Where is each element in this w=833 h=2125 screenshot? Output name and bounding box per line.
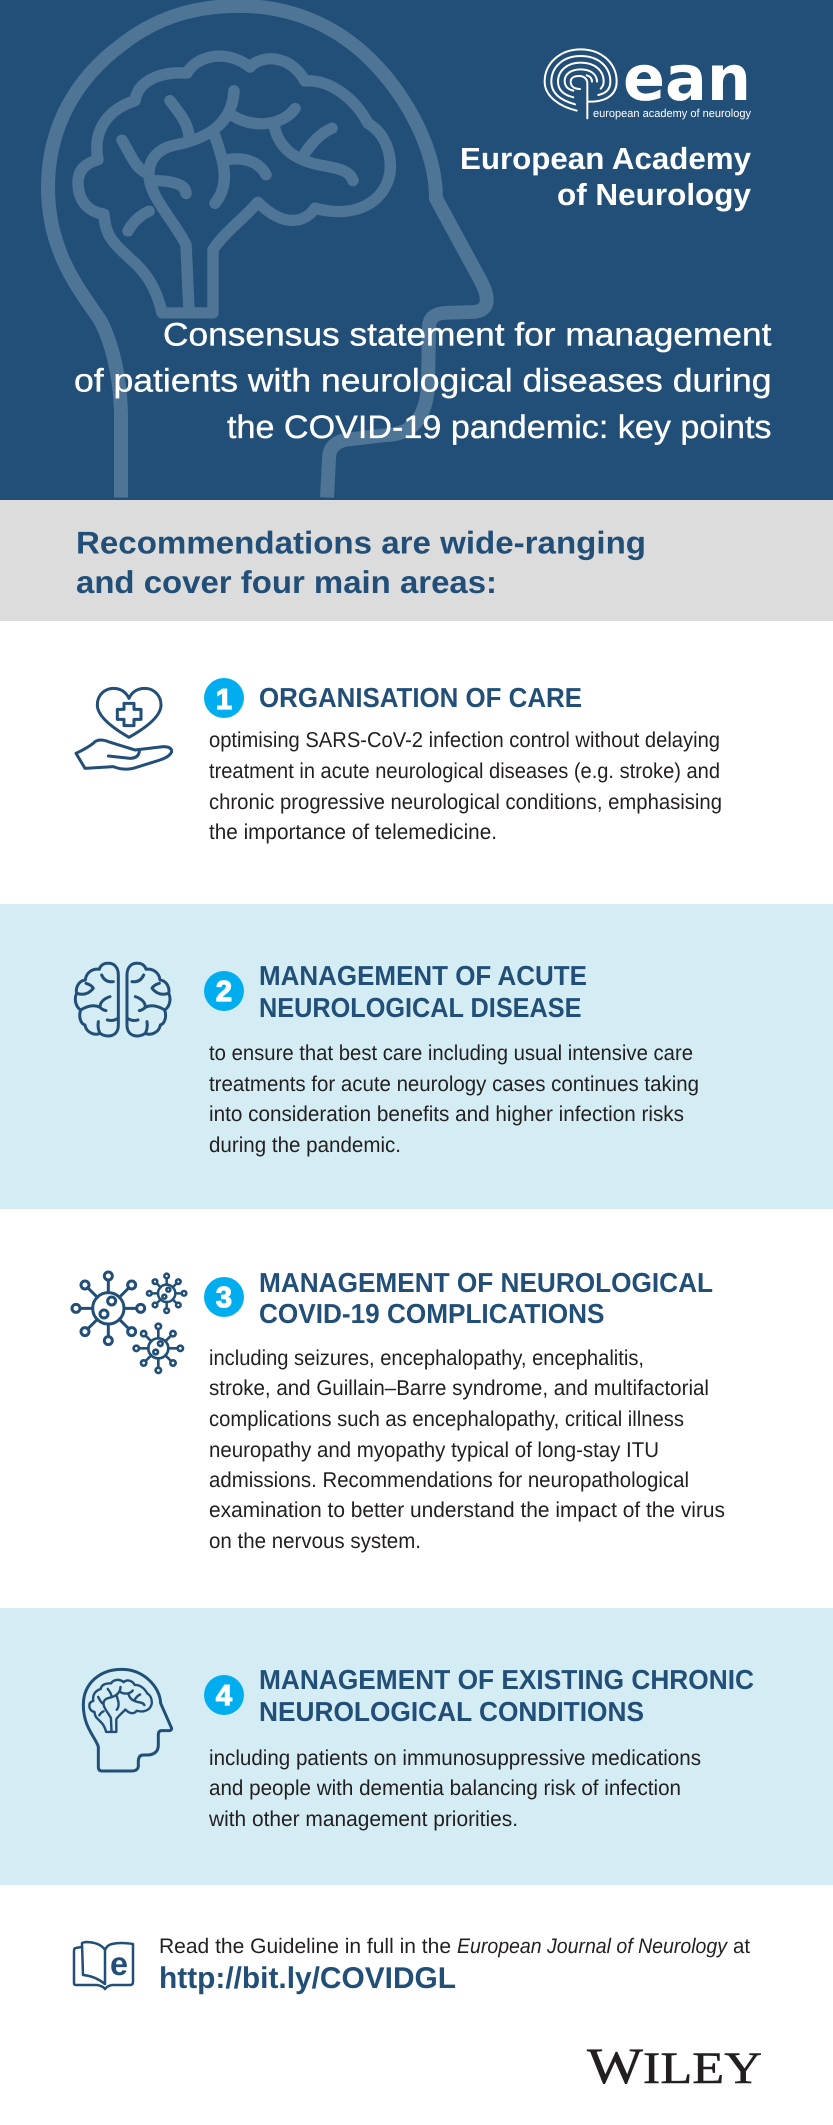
icon: e-book: [74, 1942, 133, 1989]
heading: recommendations intro: Recommendations are wide-ranging: [76, 524, 646, 560]
logo: EAN labyrinth mark and wordmark: [545, 42, 751, 120]
link: guideline url: http://bit.ly/COVIDGL: [159, 1962, 456, 1995]
title: the COVID-19 pandemic: key points: [227, 409, 772, 445]
text block: acute neurological disease: [209, 1041, 699, 1157]
icon: e-book: e: [110, 1945, 128, 1982]
panel: 3 neurological covid-19 complications: [0, 1209, 833, 1608]
text block: organisation of care: [209, 728, 722, 844]
title: Consensus statement for management: [163, 316, 772, 352]
text block: organisation of care: treatment in acute neurological diseases (e.g. stroke) and: [209, 759, 720, 783]
text: read the guideline: [159, 1935, 750, 1958]
badge: number 1: [204, 678, 244, 718]
text: read the guideline: Read the Guideline in full in the: [159, 1935, 451, 1958]
text block: existing chronic neurological conditions: with other management priorities.: [208, 1807, 518, 1831]
badge: number 3: 3: [216, 1282, 232, 1314]
text block: acute neurological disease: into consideration benefits and higher infection risks: [209, 1102, 684, 1126]
text block: neurological covid-19 complications: examination to better understand the impact of the virus: [209, 1498, 725, 1522]
heading: acute neurological disease: NEUROLOGICAL DISEASE: [259, 992, 582, 1023]
badge: number 2: 2: [216, 976, 232, 1008]
heading: neurological covid-19 complications: MANAGEMENT OF NEUROLOGICAL: [259, 1267, 713, 1298]
text: read the guideline: at: [733, 1935, 750, 1958]
icon: head with brain: [83, 1669, 172, 1771]
text block: neurological covid-19 complications: neuropathy and myopathy typical of long-stay ITU: [209, 1438, 659, 1462]
panel: header: [0, 0, 833, 500]
badge: number 4: [204, 1675, 244, 1715]
icon: brain hemispheres: [75, 963, 170, 1036]
text block: acute neurological disease: during the pandemic.: [209, 1133, 401, 1157]
text block: neurological covid-19 complications: stroke, and Guillain–Barre syndrome, and multifactorial: [209, 1376, 709, 1400]
panel: intro band: [0, 500, 833, 621]
title: of patients with neurological diseases during: [74, 362, 772, 398]
badge: number 4: 4: [216, 1680, 232, 1712]
panel: 1 organisation of care: [0, 621, 833, 904]
heading: recommendations intro: and cover four main areas:: [76, 564, 497, 600]
text block: neurological covid-19 complications: admissions. Recommendations for neuropathological: [209, 1468, 689, 1492]
text block: organisation of care: the importance of telemedicine.: [209, 820, 497, 844]
heading: European Academy of Neurology: of Neurology: [557, 178, 751, 212]
text block: existing chronic neurological conditions: [208, 1746, 701, 1831]
heading: acute neurological disease: MANAGEMENT OF ACUTE: [259, 960, 587, 991]
heading: existing chronic neurological conditions: NEUROLOGICAL CONDITIONS: [259, 1696, 644, 1727]
text block: existing chronic neurological conditions: and people with dementia balancing risk of infection: [209, 1776, 681, 1800]
heading: European Academy of Neurology: [460, 142, 751, 212]
heading: neurological covid-19 complications: COVID-19 COMPLICATIONS: [259, 1298, 604, 1329]
text block: organisation of care: chronic progressive neurological conditions, emphasising: [209, 790, 722, 814]
logo: EAN labyrinth mark and wordmark: european academy of neurology: [593, 108, 751, 120]
text block: existing chronic neurological conditions: including patients on immunosuppressive medications: [209, 1746, 701, 1770]
text block: neurological covid-19 complications: complications such as encephalopathy, critical illness: [209, 1407, 684, 1431]
heading: recommendations intro: [76, 524, 646, 600]
text block: neurological covid-19 complications: on the nervous system.: [209, 1529, 421, 1553]
heading: acute neurological disease: [259, 960, 587, 1023]
heading: existing chronic neurological conditions: [259, 1664, 754, 1727]
illustration: head and brain outline: [48, 6, 487, 497]
logo: EAN labyrinth mark and wordmark: ean: [623, 42, 751, 115]
heading: existing chronic neurological conditions: MANAGEMENT OF EXISTING CHRONIC: [259, 1664, 754, 1695]
text block: acute neurological disease: treatments for acute neurology cases continues taking: [209, 1072, 699, 1096]
badge: number 2: [204, 971, 244, 1011]
logo: Wiley: WILEY: [587, 2039, 762, 2095]
text block: acute neurological disease: to ensure that best care including usual intensive care: [209, 1041, 693, 1065]
badge: number 3: [204, 1277, 244, 1317]
panel: 4 existing chronic neurological conditions: [0, 1608, 833, 1885]
heading: neurological covid-19 complications: [259, 1267, 713, 1329]
panel: 2 acute neurological disease: [0, 904, 833, 1209]
title: [74, 316, 772, 445]
heading: European Academy of Neurology: European Academy: [460, 142, 751, 176]
panel: footer: [0, 1885, 833, 2125]
heading: organisation of care: ORGANISATION OF CARE: [259, 682, 582, 713]
icon: heart with cross over hand: [76, 688, 172, 769]
icon: virus particles: [72, 1272, 186, 1373]
text: read the guideline: European Journal of Neurology: [457, 1935, 728, 1958]
text block: organisation of care: optimising SARS-CoV-2 infection control without delaying: [209, 728, 720, 752]
text block: neurological covid-19 complications: [209, 1346, 725, 1553]
text block: neurological covid-19 complications: including seizures, encephalopathy, encephalitis,: [209, 1346, 644, 1370]
badge: number 1: 1: [216, 684, 232, 716]
